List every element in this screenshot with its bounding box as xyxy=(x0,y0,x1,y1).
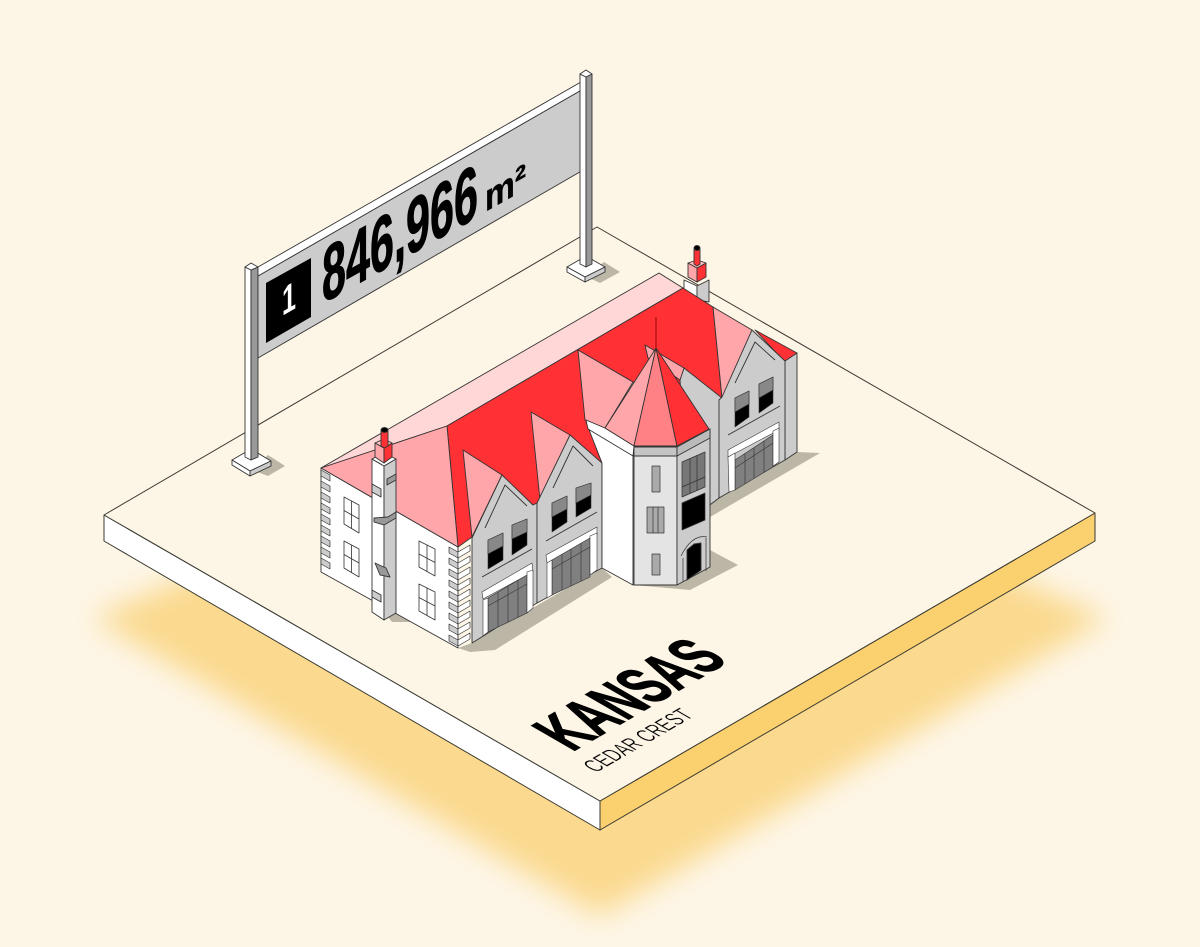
left corner quoins xyxy=(321,470,330,569)
building xyxy=(321,246,797,648)
sign panel xyxy=(258,82,585,358)
right post base shadow xyxy=(585,262,620,283)
tower side windows xyxy=(682,452,705,530)
state name: KANSAS xyxy=(517,629,743,760)
front corner quoins xyxy=(449,545,470,646)
dormer pink slope 2 xyxy=(531,412,570,500)
garage door 3 xyxy=(728,422,779,492)
area value: 846,966 xyxy=(322,146,478,321)
back chimney xyxy=(684,246,709,302)
left post xyxy=(245,263,258,460)
gable trim lines xyxy=(482,342,780,577)
tower front windows xyxy=(647,466,664,575)
left wall windows xyxy=(344,497,435,620)
area unit: m² xyxy=(485,155,526,220)
tower left wall xyxy=(586,422,633,585)
garage door 1 xyxy=(482,563,533,636)
red main roof xyxy=(447,288,722,547)
garage door 2 xyxy=(546,527,597,598)
left wall xyxy=(321,468,458,648)
far right side wall xyxy=(785,353,797,460)
tower roof right facet xyxy=(656,348,709,446)
tower front band xyxy=(634,447,677,456)
behind-tower pink sliver xyxy=(645,345,684,380)
billboard xyxy=(232,70,620,476)
platform xyxy=(104,227,1095,830)
tower right wall xyxy=(677,429,710,585)
location name: CEDAR CREST xyxy=(577,705,700,776)
right post base xyxy=(567,256,605,282)
tower xyxy=(586,317,710,585)
rank badge: 1 xyxy=(282,273,296,325)
tower door xyxy=(681,537,707,582)
right roof red corner xyxy=(755,330,797,361)
gable windows xyxy=(488,377,773,569)
spire line xyxy=(655,317,657,348)
behind-tower facade xyxy=(680,368,722,520)
middle dormer pink slope xyxy=(578,350,633,428)
tower right band xyxy=(677,429,710,456)
dormer pink slope 1 xyxy=(463,450,502,537)
platform right side xyxy=(600,513,1095,830)
gable facade 3 xyxy=(719,330,785,498)
tower left eave xyxy=(586,420,634,456)
gable facade 1 xyxy=(472,475,537,643)
platform left side xyxy=(104,515,600,830)
front chimney xyxy=(372,428,396,620)
tower roof middle facet xyxy=(634,348,677,446)
pale back roof xyxy=(321,273,683,468)
right roof pink slope xyxy=(713,307,752,398)
left post base shadow xyxy=(252,455,285,476)
rank badge xyxy=(266,258,311,343)
right post xyxy=(580,70,592,267)
left hip roof xyxy=(321,426,458,547)
building shadows xyxy=(384,452,820,652)
platform top xyxy=(104,227,1095,801)
tower front wall xyxy=(634,447,677,585)
left post base xyxy=(232,449,271,476)
platform ground shadow xyxy=(92,400,1108,916)
gable facade 2 xyxy=(537,435,602,603)
tower roof left facet xyxy=(605,348,656,446)
